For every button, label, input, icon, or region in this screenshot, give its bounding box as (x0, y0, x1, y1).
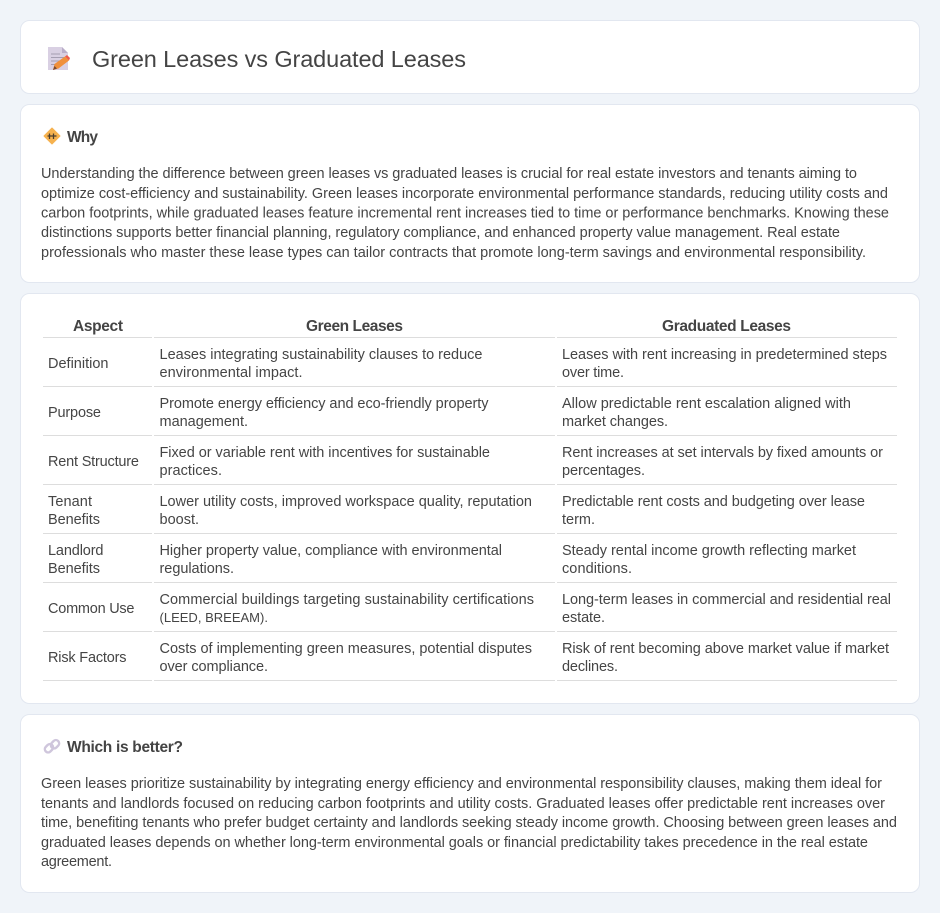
text block: why: distinctions supports better financial planning, regulatory compliance, and enhanced property value management. Real estate (41, 225, 840, 241)
row: common use: (LEED, BREEAM). (160, 610, 268, 625)
row: definition (43, 347, 897, 387)
table header row: Aspect (73, 318, 123, 335)
text block: which is better: graduated leases depends on whether long-term environmental goals or financial predictability takes precedence in the real estate (41, 835, 868, 851)
text block: why: professionals who master these lease types can tailor contracts that promote long-term savings and environmental responsibility. (41, 245, 866, 261)
row: purpose (43, 396, 897, 436)
table header row (43, 318, 897, 338)
row: purpose: Purpose (48, 405, 101, 421)
panel: why (20, 104, 920, 282)
panel: comparison table (20, 294, 920, 704)
panel: which is better (20, 714, 920, 892)
text block: why (41, 166, 889, 261)
text block: why: Understanding the difference between green leases vs graduated leases is crucial for real estate investors and tenants aiming to (41, 166, 857, 182)
row: definition: Leases with rent increasing in predetermined steps (562, 347, 887, 363)
text block: which is better: Green leases prioritize sustainability by integrating energy efficiency and environmental responsibility clauses, making them ideal for (41, 776, 882, 792)
row: tenant benefits (43, 494, 897, 534)
row: risk factors: declines. (562, 659, 618, 675)
row: landlord benefits (43, 543, 897, 583)
row: tenant benefits: Tenant (48, 494, 92, 510)
text block: why: optimize cost-efficiency and sustainability. Green leases incorporate environmental performance standards, reducing utility costs and (41, 186, 888, 202)
row: definition: over time. (562, 365, 624, 381)
table header row: Graduated Leases (662, 318, 791, 335)
row: rent structure: percentages. (562, 463, 645, 479)
table header row: Green Leases (306, 318, 403, 335)
icon: document with pencil (48, 47, 70, 70)
row: tenant benefits: term. (562, 512, 595, 528)
row: landlord benefits: conditions. (562, 561, 632, 577)
heading: which is better: Which is better? (67, 739, 183, 756)
row: purpose: Allow predictable rent escalation aligned with (562, 396, 851, 412)
text block: which is better (41, 776, 897, 870)
row: risk factors: Risk Factors (48, 650, 126, 666)
row: common use: estate. (562, 610, 605, 626)
row: common use (43, 592, 897, 632)
row: common use: Common Use (48, 601, 134, 617)
row: rent structure: Rent Structure (48, 454, 139, 470)
row: purpose: management. (160, 414, 248, 430)
row: common use: Long-term leases in commercial and residential real (562, 592, 891, 608)
row: tenant benefits: Benefits (48, 512, 100, 528)
row: risk factors (43, 641, 897, 681)
row: definition: Leases integrating sustainability clauses to reduce (160, 347, 482, 363)
heading: why: Why (67, 129, 98, 146)
icon: warning diamond (44, 128, 60, 144)
row: landlord benefits: Higher property value, compliance with environmental (160, 543, 502, 559)
icon: chain link (44, 739, 60, 754)
row: purpose: market changes. (562, 414, 668, 430)
row: landlord benefits: Steady rental income growth reflecting market (562, 543, 856, 559)
panel: page header (20, 20, 920, 94)
title: Green Leases vs Graduated Leases (92, 46, 466, 72)
row: tenant benefits: Predictable rent costs and budgeting over lease (562, 494, 865, 510)
text block: which is better: tenants and landlords focused on reducing carbon footprints and utility costs. Graduated leases offer predictable rent increases over (41, 796, 885, 812)
row: risk factors: Risk of rent becoming above market value if market (562, 641, 889, 657)
text block: which is better: agreement. (41, 854, 112, 870)
row: definition: environmental impact. (160, 365, 302, 381)
row: rent structure: practices. (160, 463, 222, 479)
text block: why: carbon footprints, while graduated leases feature incremental rent increases tied to time or performance benchmarks. Knowing these (41, 206, 889, 222)
row: tenant benefits: Lower utility costs, improved workspace quality, reputation (160, 494, 532, 510)
row: rent structure: Fixed or variable rent with incentives for sustainable (160, 445, 490, 461)
row: tenant benefits: boost. (160, 512, 199, 528)
row: common use: Commercial buildings targeting sustainability certifications (160, 592, 534, 608)
row: rent structure: Rent increases at set intervals by fixed amounts or (562, 445, 883, 461)
row: landlord benefits: Benefits (48, 561, 100, 577)
row: risk factors: over compliance. (160, 659, 268, 675)
row: purpose: Promote energy efficiency and eco-friendly property (160, 396, 489, 412)
row: definition: Definition (48, 356, 108, 372)
text block: which is better: time, benefiting tenants who prefer budget certainty and landlords seeking steady income growth. Choosing between green leases and (41, 815, 897, 831)
row: landlord benefits: regulations. (160, 561, 234, 577)
row: rent structure (43, 445, 897, 485)
row: landlord benefits: Landlord (48, 543, 104, 559)
row: risk factors: Costs of implementing green measures, potential disputes (160, 641, 532, 657)
